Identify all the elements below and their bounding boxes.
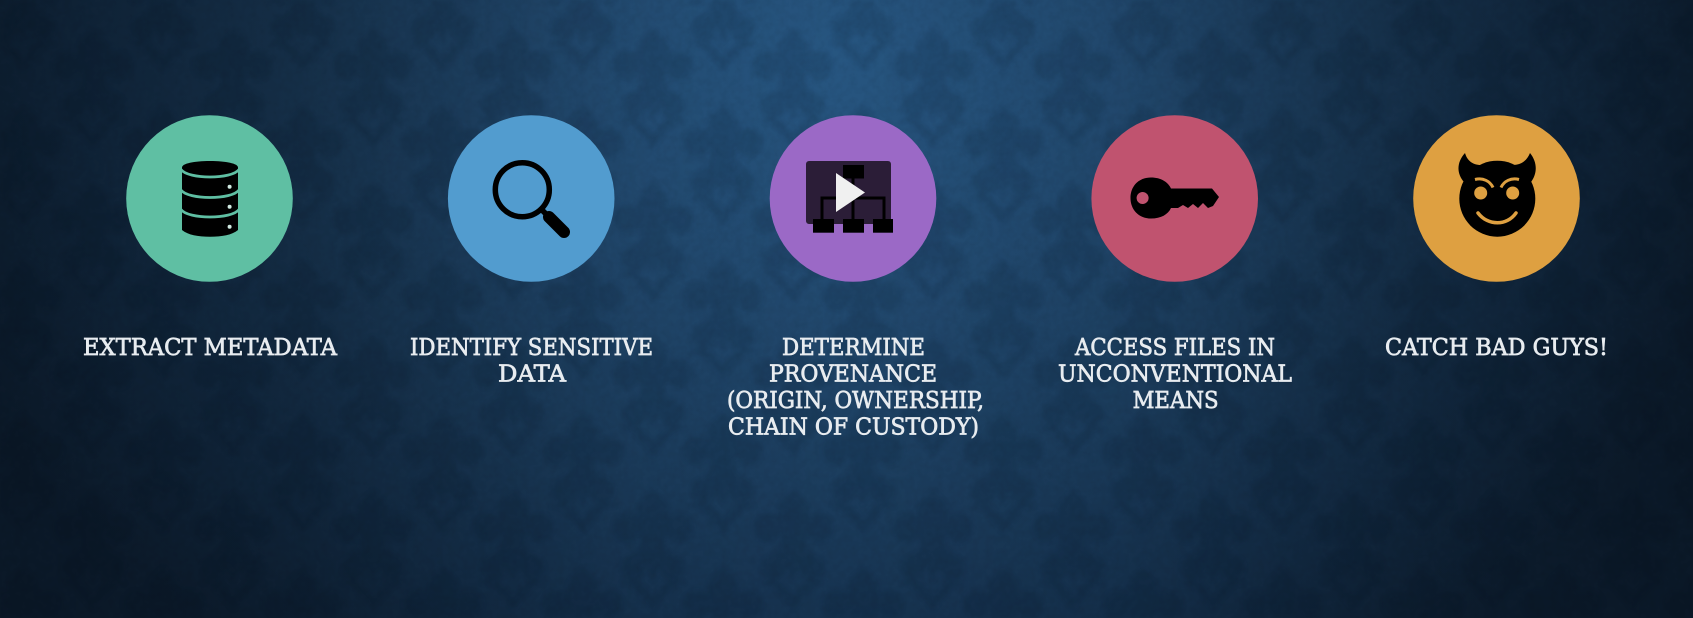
label: determine provenance: DETERMINE — [782, 335, 925, 361]
video play button — [806, 161, 891, 224]
step 5: catch bad guys — [1385, 115, 1608, 361]
green circle — [126, 115, 293, 282]
label: access files: UNCONVENTIONAL — [1058, 362, 1292, 388]
label: access files: ACCESS FILES IN — [1074, 335, 1275, 361]
label: identify sensitive data — [410, 335, 653, 388]
step 3: determine provenance — [727, 115, 984, 440]
pink circle — [1091, 115, 1258, 282]
icon: devil face — [1458, 153, 1536, 237]
label: identify sensitive data: DATA — [498, 362, 566, 388]
step 4: access files — [1058, 115, 1292, 414]
icon: database — [181, 161, 239, 237]
label: determine provenance — [727, 335, 984, 440]
step 2: identify sensitive data — [410, 115, 653, 387]
label: determine provenance: PROVENANCE — [769, 362, 937, 388]
label: determine provenance: CHAIN OF CUSTODY) — [728, 414, 979, 440]
label: access files: MEANS — [1133, 388, 1219, 414]
purple circle — [770, 115, 936, 282]
orange circle — [1413, 115, 1580, 282]
label: access files — [1058, 335, 1292, 414]
icon: magnifying glass — [495, 163, 564, 232]
label: catch bad guys: CATCH BAD GUYS! — [1385, 335, 1608, 361]
step 1: extract metadata — [83, 115, 337, 361]
icon: key — [1130, 178, 1219, 218]
icon: hierarchy — [813, 165, 893, 233]
blue circle — [448, 115, 614, 282]
label: extract metadata: EXTRACT METADATA — [83, 335, 337, 361]
label: determine provenance: (ORIGIN, OWNERSHIP, — [727, 388, 984, 414]
label: identify sensitive data: IDENTIFY SENSITIVE — [410, 335, 653, 361]
